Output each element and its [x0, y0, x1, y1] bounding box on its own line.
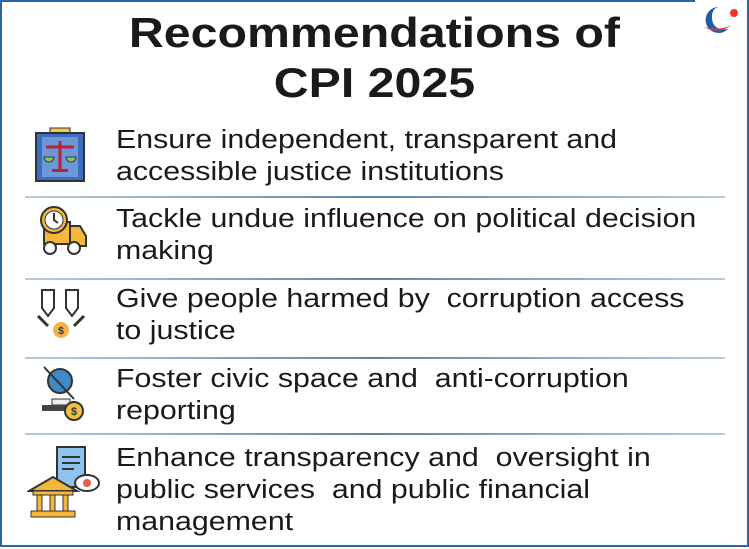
title: Recommendations of	[129, 9, 620, 56]
icon: bank with document and eye	[27, 446, 100, 518]
icon: truck clock	[40, 206, 87, 255]
item 2 text: Tackle undue influence on political decision	[116, 205, 696, 233]
item 4 text: Foster civic space and anti-corruption	[116, 365, 629, 393]
item 1 text: accessible justice institutions	[116, 158, 504, 186]
icon: globe coin	[42, 366, 84, 421]
item 3 text: to justice	[116, 317, 236, 345]
item 5 text: Enhance transparency and oversight in	[116, 444, 651, 472]
item 5 text: management	[116, 508, 293, 536]
title: CPI 2025	[274, 59, 475, 106]
logo	[704, 7, 738, 33]
item 1 text	[116, 126, 617, 186]
item 3 text: Give people harmed by corruption access	[116, 285, 684, 313]
item 4 text	[116, 365, 629, 425]
title	[129, 9, 620, 106]
item 2 text	[116, 205, 696, 265]
item 5 text: public services and public financial	[116, 476, 590, 504]
item 4 text: reporting	[116, 397, 236, 425]
icon: hands with coin: $	[58, 326, 64, 337]
item 5 text	[116, 444, 651, 536]
icon: justice building	[35, 128, 85, 182]
icon: globe coin: $	[71, 406, 77, 418]
item 1 text: Ensure independent, transparent and	[116, 126, 617, 154]
item 2 text: making	[116, 237, 214, 265]
icon: hands with coin	[37, 289, 85, 338]
item 3 text	[116, 285, 684, 345]
